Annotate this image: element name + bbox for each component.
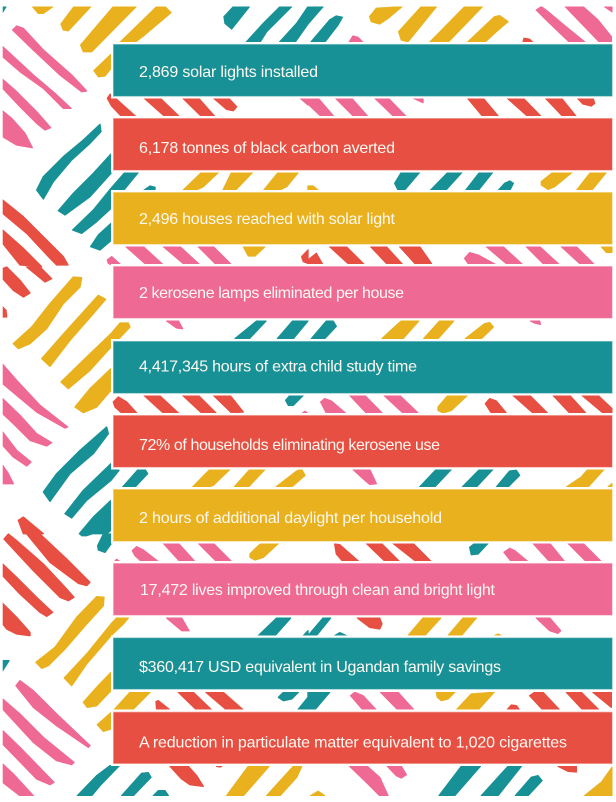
bar: black carbon averted	[111, 116, 616, 172]
bar text: 2,496 houses reached with solar light	[139, 211, 396, 228]
bar text: 17,472 lives improved through clean and bright light	[140, 582, 496, 599]
bar text: A reduction in particulate matter equivalent to 1,020 cigarettes	[139, 734, 567, 752]
bar: houses reached	[111, 190, 616, 246]
pattern: brush strokes bottom left	[3, 534, 308, 796]
bar text: 2 kerosene lamps eliminated per house	[139, 285, 404, 302]
bar: additional daylight	[111, 487, 616, 544]
pattern: brush strokes bottom right	[308, 543, 612, 796]
bar text: 2 hours of additional daylight per household	[139, 510, 442, 527]
bar text: 72% of households eliminating kerosene use	[139, 437, 440, 454]
pattern: brush strokes middle right	[311, 321, 612, 487]
bar text: 4,417,345 hours of extra child study time	[139, 358, 417, 376]
bar: solar lights installed	[111, 42, 616, 98]
pattern: brush strokes middle left	[3, 267, 308, 534]
bar text: 2,869 solar lights installed	[139, 64, 318, 81]
bar: lives improved	[111, 561, 616, 618]
bar text: 6,178 tonnes of black carbon averted	[139, 140, 395, 157]
pattern: brush strokes top left	[3, 7, 323, 267]
bar text: $360,417 USD equivalent in Ugandan family savings	[139, 659, 501, 676]
bar: child study time	[111, 339, 616, 396]
bar: households eliminating kerosene	[111, 413, 616, 470]
pattern: brush strokes top right	[308, 7, 612, 265]
bar: kerosene lamps eliminated	[111, 264, 616, 320]
bar: particulate matter reduction	[111, 710, 616, 766]
bar: family savings	[111, 636, 616, 692]
